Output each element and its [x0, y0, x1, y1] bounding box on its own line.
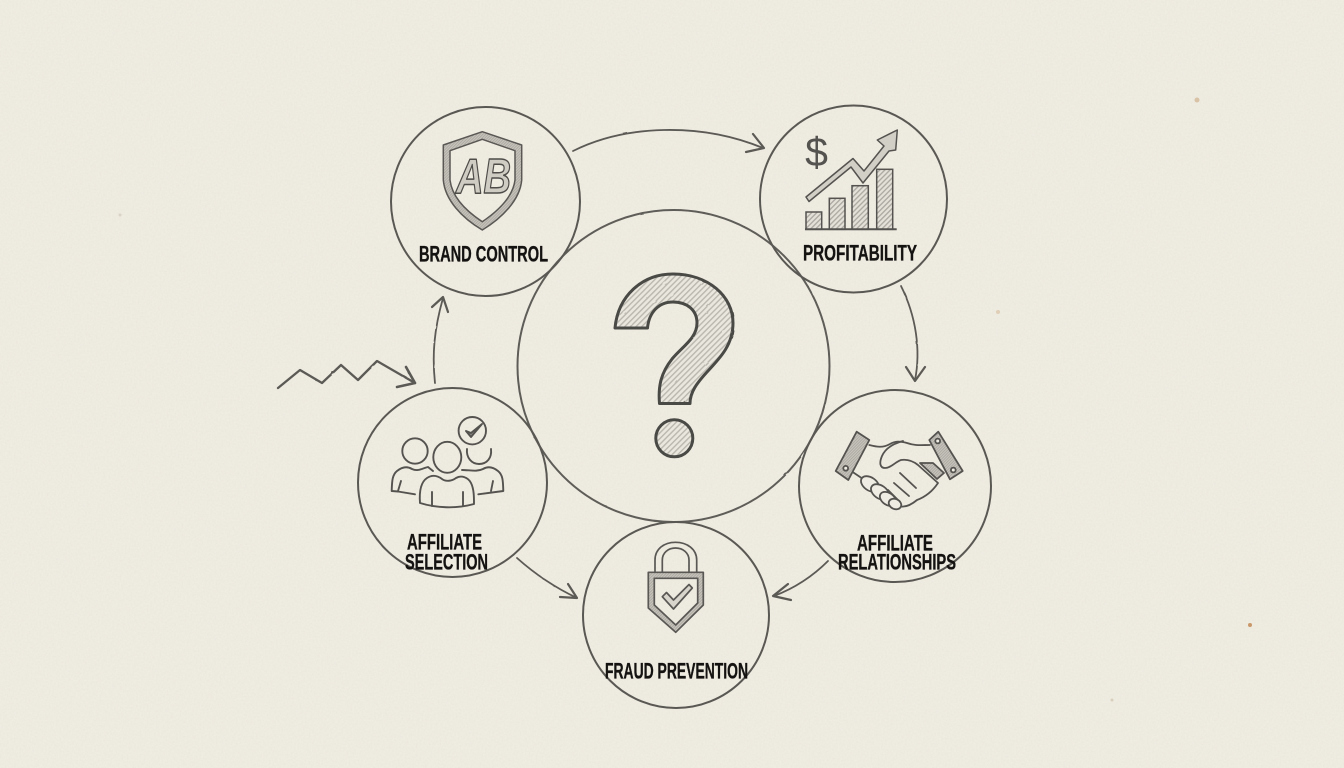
icon: AB shield: AB: [455, 150, 511, 204]
label: affiliate relationships: RELATIONSHIPS: [838, 550, 956, 574]
arrows connecting the cycle: [278, 130, 925, 600]
icon: padlock shield with check: [648, 542, 703, 632]
arrow: affiliate selection to fraud prevention: [517, 558, 577, 598]
arrow: affiliate relationships to fraud prevention: [773, 561, 828, 600]
label: affiliate selection: [405, 530, 488, 574]
hands: [853, 441, 938, 507]
label: affiliate selection: SELECTION: [405, 550, 488, 574]
dollar sign: $: [805, 129, 828, 175]
central circle with question mark: [518, 210, 830, 522]
check badge: [459, 417, 486, 444]
arrow: brand control to profitability: [573, 130, 764, 152]
panel: affiliate relationships: [799, 390, 991, 582]
panel: affiliate selection: [358, 388, 547, 577]
arrow: zigzag input: [278, 361, 415, 388]
icon: rising bar chart with dollar: [805, 129, 897, 229]
fingers: [858, 473, 903, 511]
bars: [806, 169, 893, 229]
label: affiliate selection: AFFILIATE: [407, 530, 482, 554]
icon: question mark: [615, 274, 733, 457]
icon: handshake: [836, 432, 963, 511]
icon: group of people with check badge: [392, 417, 503, 507]
rising arrow: [806, 130, 897, 202]
cuffs: [836, 432, 869, 480]
label: brand control: BRAND CONTROL: [419, 242, 548, 266]
label: profitability: PROFITABILITY: [803, 240, 917, 266]
arrow: affiliate selection to brand control: [432, 297, 448, 383]
label: affiliate relationships: AFFILIATE: [857, 530, 933, 556]
arrow: profitability to affiliate relationships: [901, 286, 925, 381]
panel: brand control: [391, 107, 580, 296]
panel: fraud prevention: [583, 522, 769, 708]
label: fraud prevention: FRAUD PREVENTION: [605, 658, 748, 684]
icon: AB shield: [443, 132, 522, 230]
panel: profitability: [760, 106, 947, 292]
label: affiliate relationships: [838, 530, 956, 574]
